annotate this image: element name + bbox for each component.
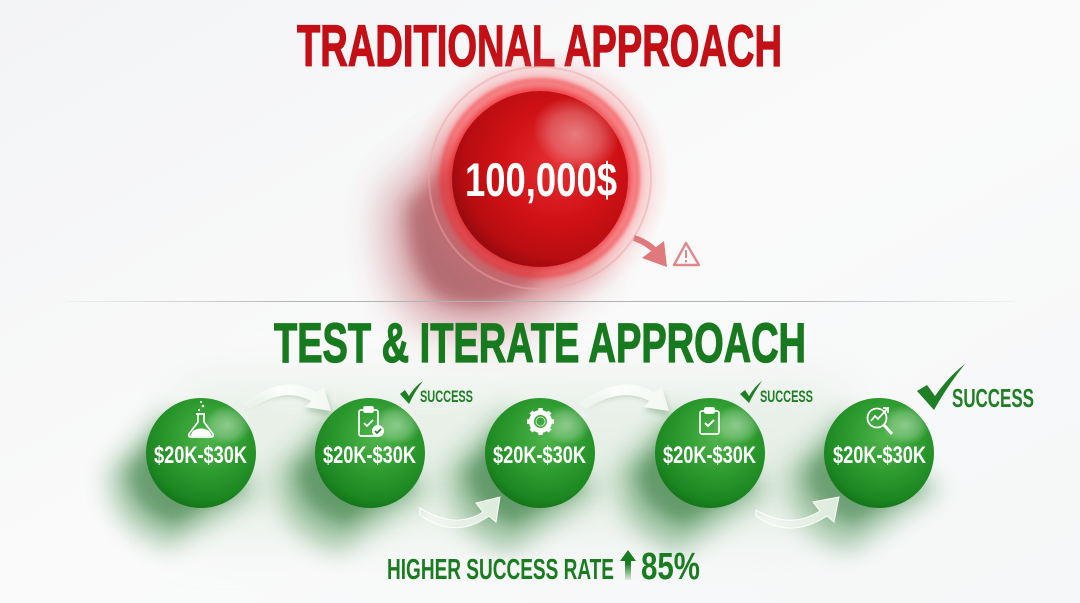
title: test and iterate approach: TEST & ITERATE APPROACH	[274, 311, 806, 374]
step 4: sphere	[655, 398, 765, 508]
green sphere shadows	[108, 410, 942, 552]
step 2: sphere	[315, 398, 425, 508]
cost label: 100,000$	[465, 153, 617, 206]
arrow: step 1 to 2	[243, 384, 331, 416]
success label: SUCCESS	[420, 387, 473, 406]
success label: SUCCESS	[760, 387, 813, 406]
icon: magnifier with chart	[868, 408, 892, 434]
icon: large check mark	[917, 364, 965, 410]
success badge: step 2	[400, 381, 473, 406]
cost label: $20K-$30K	[663, 442, 757, 469]
cost label: $20K-$30K	[493, 442, 587, 469]
icon: check mark	[740, 381, 762, 403]
percentage: 85%	[641, 546, 700, 588]
icon: check mark	[400, 381, 423, 404]
red sphere shadow	[384, 135, 610, 334]
success label: SUCCESS	[952, 383, 1034, 413]
warning arrow	[634, 238, 667, 267]
step 3: sphere	[485, 398, 595, 508]
success badge: step 4	[740, 381, 813, 406]
sphere highlight	[522, 85, 630, 183]
icon: gear	[527, 408, 554, 435]
step 5: sphere	[824, 398, 934, 508]
step 1: sphere	[146, 398, 256, 508]
sphere body	[452, 91, 628, 267]
icon: warning triangle	[674, 243, 699, 265]
icon: flask	[189, 401, 213, 437]
title: traditional approach: TRADITIONAL APPROACH	[297, 14, 782, 79]
higher success rate label: HIGHER SUCCESS RATE	[387, 554, 614, 586]
success rate callout	[387, 546, 700, 588]
arrow: step 2 to 3	[420, 497, 500, 528]
divider line	[66, 301, 1014, 302]
red sphere with cost	[410, 48, 670, 308]
sphere glow	[410, 48, 670, 308]
icon: up arrow	[620, 550, 636, 580]
success badge: step 5	[917, 364, 1034, 413]
arrow: step 3 to 4	[578, 384, 669, 416]
cost label: $20K-$30K	[323, 442, 417, 469]
arrow: step 4 to 5	[756, 497, 839, 528]
cost label: $20K-$30K	[833, 442, 927, 469]
cost label: $20K-$30K	[154, 442, 248, 469]
icon: clipboard with badge	[359, 407, 384, 437]
icon: clipboard	[700, 408, 719, 434]
